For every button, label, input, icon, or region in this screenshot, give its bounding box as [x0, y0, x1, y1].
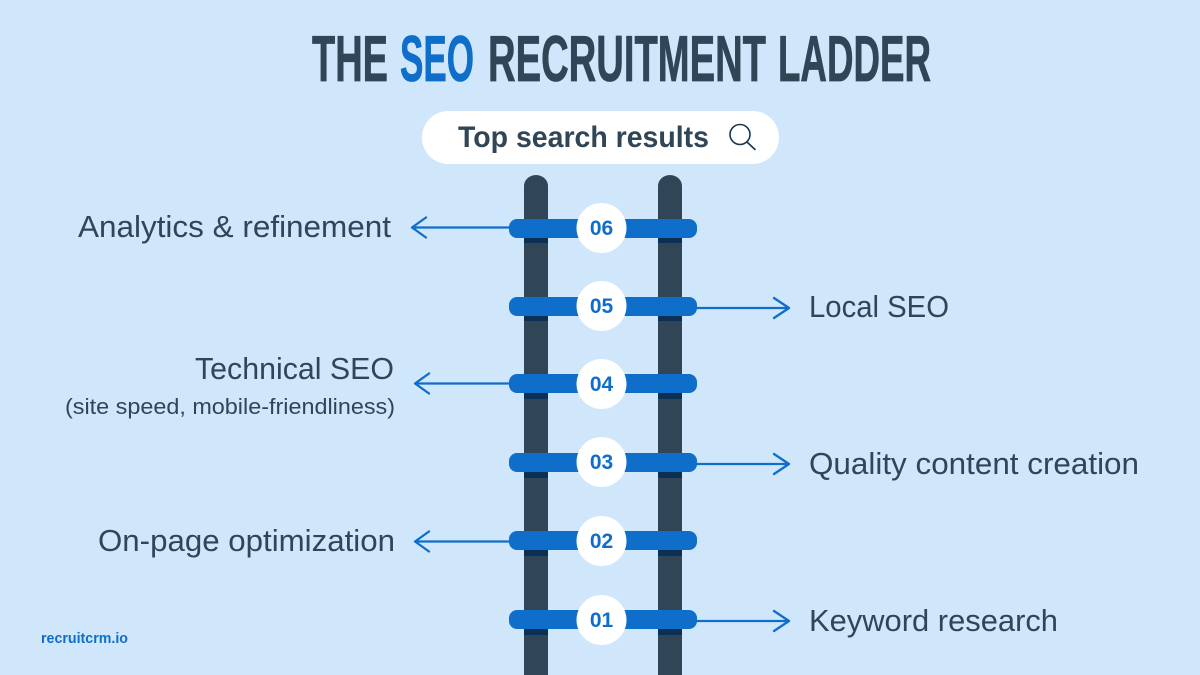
step badges: 04 [590, 373, 613, 396]
step labels: Technical SEO [195, 351, 394, 386]
rungs [509, 219, 697, 629]
title: SEO [400, 22, 474, 95]
step badges: 05 [590, 295, 613, 318]
left rail [524, 175, 548, 675]
step labels: Quality content creation [809, 446, 1139, 481]
rung shadows [524, 236, 682, 635]
step labels: Keyword research [809, 603, 1058, 638]
title: RECRUITMENT [488, 22, 766, 95]
title [312, 22, 931, 95]
step badges: 01 [590, 609, 613, 632]
step badges [576, 203, 626, 645]
step badges: 02 [590, 530, 613, 553]
right rail [658, 175, 682, 675]
arrows [412, 218, 789, 631]
step labels [65, 209, 1139, 638]
search bar label: Top search results [458, 121, 709, 154]
step labels: On-page optimization [98, 523, 395, 558]
step badges: 06 [590, 217, 613, 240]
title: LADDER [778, 22, 931, 95]
step labels: Local SEO [809, 289, 949, 324]
brand url: recruitcrm.io [41, 630, 128, 647]
search bar [422, 111, 779, 164]
ladder [509, 175, 697, 675]
step labels: Analytics & refinement [78, 209, 391, 244]
icon: magnifying glass [730, 124, 755, 150]
title: THE [312, 22, 388, 95]
step badges: 03 [590, 451, 613, 474]
step labels: (site speed, mobile-friendliness) [65, 394, 395, 419]
